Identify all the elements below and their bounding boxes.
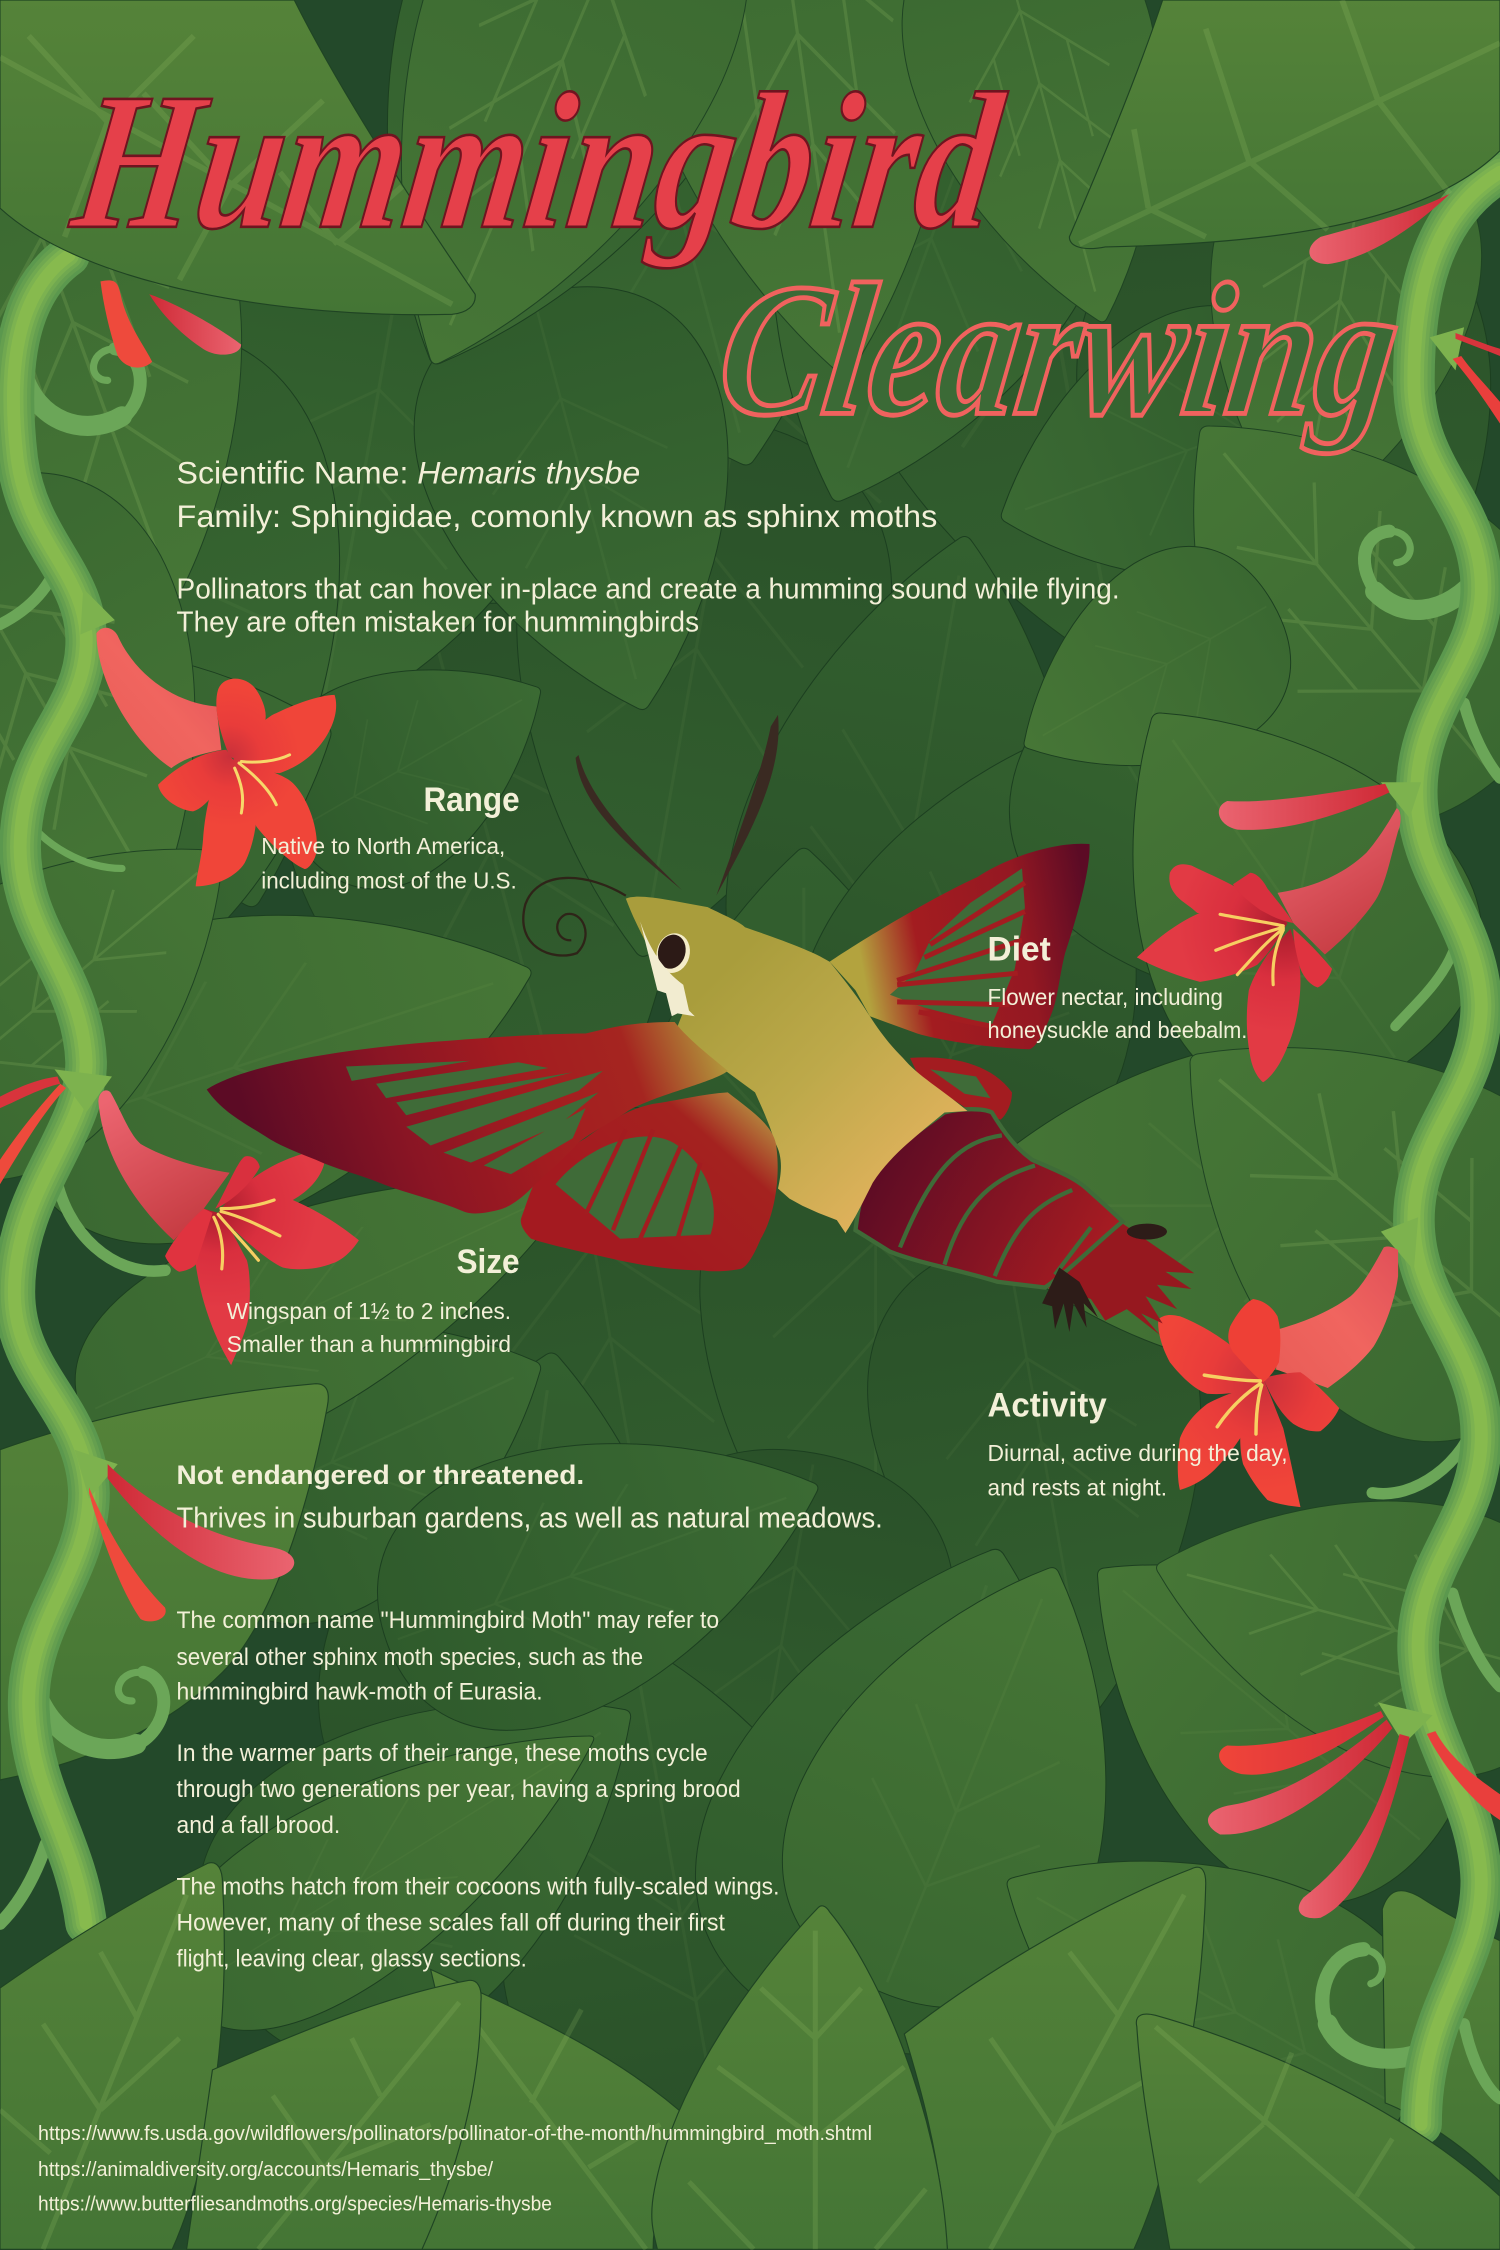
callout: range xyxy=(261,781,520,894)
callout: activity: and rests at night. xyxy=(988,1475,1167,1501)
facts: common name: several other sphinx moth species, such as the xyxy=(177,1645,643,1671)
callout: range: Range xyxy=(423,781,520,819)
left vine xyxy=(13,256,89,1923)
callout: size: Size xyxy=(456,1243,520,1281)
proboscis xyxy=(523,878,626,955)
conservation status xyxy=(177,1459,883,1534)
title: Hummingbird: Hummingbird xyxy=(61,54,1014,270)
flower: upper left xyxy=(96,628,336,886)
facts: generations xyxy=(177,1741,741,1839)
abdomen xyxy=(856,1109,1194,1335)
family: Family: Sphingidae, comonly known as sphinx moths xyxy=(177,498,937,534)
title xyxy=(61,54,1412,455)
antenna right xyxy=(716,715,779,896)
face tuft xyxy=(640,922,695,1016)
facts: common name: hummingbird hawk-moth of Eurasia. xyxy=(177,1680,543,1706)
moth illustration xyxy=(207,715,1194,1335)
right vine xyxy=(1414,172,1500,2124)
back wing xyxy=(830,844,1090,1120)
scientific name: Scientific Name: Hemaris thysbe xyxy=(177,455,640,491)
callout: activity xyxy=(988,1387,1288,1501)
flower: upper right xyxy=(1137,808,1401,1082)
thorax and head xyxy=(626,897,967,1233)
callout: size xyxy=(227,1243,520,1357)
source links: https://animaldiversity.org/accounts/Hemaris_thysbe/ xyxy=(38,2159,493,2181)
facts: common name: The common name "Hummingbird Moth" may refer to xyxy=(177,1608,719,1634)
intro text xyxy=(177,455,1120,639)
callout: size: Wingspan of 1½ to 2 inches. xyxy=(227,1298,511,1324)
hanging petals xyxy=(0,194,1500,1918)
antennae xyxy=(576,755,682,890)
callout: activity: Diurnal, active during the day, xyxy=(988,1440,1288,1466)
description line two: They are often mistaken for hummingbirds xyxy=(177,607,699,639)
flower: lower left xyxy=(98,1090,359,1365)
callout: activity: Activity xyxy=(988,1387,1107,1425)
source links: https://www.fs.usda.gov/wildflowers/pollinators/pollinator-of-the-month/hummingbird_moth.shtml xyxy=(38,2123,872,2145)
callout: diet: Flower nectar, including xyxy=(988,984,1223,1010)
facts: generations: and a fall brood. xyxy=(177,1813,340,1839)
source links: https://www.butterfliesandmoths.org/species/Hemaris-thysbe xyxy=(38,2194,552,2216)
forewing xyxy=(207,1022,778,1271)
facts: scales: The moths hatch from their cocoons with fully-scaled wings. xyxy=(177,1875,779,1901)
callout: range: including most of the U.S. xyxy=(261,868,517,894)
callout: diet: honeysuckle and beebalm. xyxy=(988,1017,1247,1043)
facts: generations: In the warmer parts of their range, these moths cycle xyxy=(177,1741,708,1767)
facts: scales: flight, leaving clear, glassy sections. xyxy=(177,1947,527,1973)
callout: diet xyxy=(988,930,1247,1043)
facts: common name xyxy=(177,1608,719,1706)
conservation status: Not endangered or threatened. xyxy=(177,1459,584,1490)
callout: range: Native to North America, xyxy=(261,833,505,859)
eye xyxy=(652,929,694,977)
source links xyxy=(38,2123,872,2216)
facts: generations: through two generations per year, having a spring brood xyxy=(177,1777,741,1803)
conservation status: Thrives in suburban gardens, as well as natural meadows. xyxy=(177,1502,883,1534)
callout: diet: Diet xyxy=(988,930,1051,968)
description line one: Pollinators that can hover in-place and create a humming sound while flying. xyxy=(177,574,1120,606)
tendrils xyxy=(0,349,1500,2099)
callout: size: Smaller than a hummingbird xyxy=(227,1331,511,1357)
facts: scales xyxy=(177,1875,779,1973)
facts: scales: However, many of these scales fall off during their first xyxy=(177,1911,725,1937)
flower: lower right xyxy=(1158,1247,1398,1507)
calyx nubs on vines xyxy=(55,327,1464,1744)
